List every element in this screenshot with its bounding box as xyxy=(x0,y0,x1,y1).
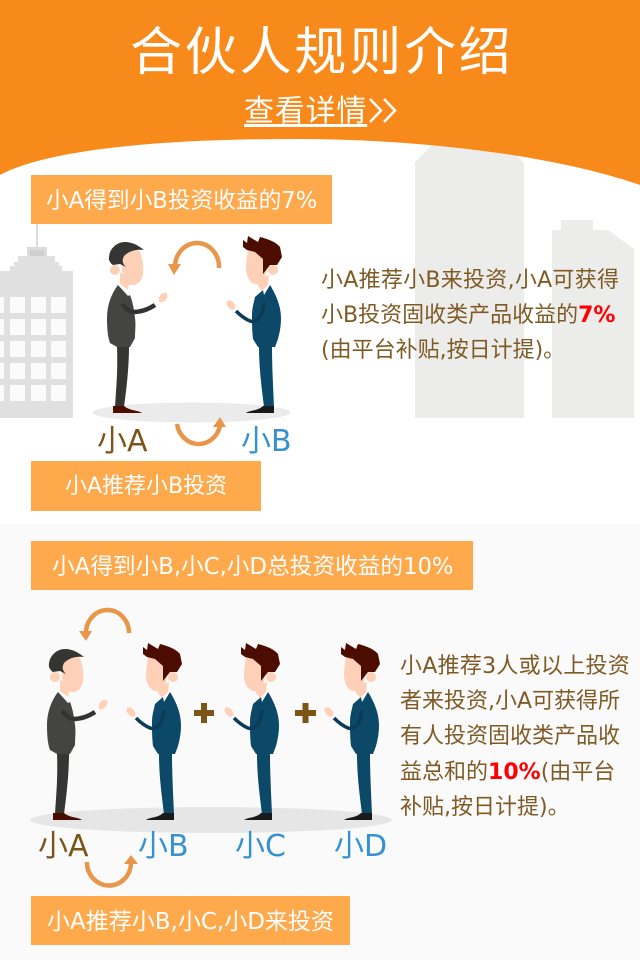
link: view details: 查看详情 xyxy=(244,94,367,129)
text: section 1 description: (由平台补贴,按日计提)。 xyxy=(321,338,565,363)
left building xyxy=(0,224,73,418)
callout: A recommends B, C, D: 小A推荐小B,小C,小D来投资 xyxy=(47,909,334,935)
heading: section 1 reward xyxy=(31,175,332,224)
text: section 2 description: 有人投资固收类产品收 xyxy=(400,724,620,749)
label: B section 1: 小B xyxy=(241,424,292,459)
orange header curve xyxy=(0,0,640,185)
text: section 2 description: 小A推荐3人或以上投资 xyxy=(400,654,630,679)
double chevron icon xyxy=(370,99,395,122)
text: section 1 description xyxy=(321,268,619,363)
arrow: top section 2 xyxy=(79,610,129,641)
ground shadow 2 xyxy=(30,807,392,833)
right buildings xyxy=(415,144,634,418)
callout: A recommends B, C, D xyxy=(31,896,350,945)
label: A section 1: 小A xyxy=(97,424,148,459)
text: section 1 description: 小B投资固收类产品收益的7% xyxy=(321,303,615,328)
title: 合伙人规则介绍 xyxy=(130,23,514,83)
figure: A in section 2 xyxy=(47,649,109,820)
callout: A recommends B xyxy=(31,461,261,511)
heading: section 1 reward: 小A得到小B投资收益的7% xyxy=(46,188,317,214)
figure: A in section 1 xyxy=(107,242,169,413)
callout: A recommends B: 小A推荐小B投资 xyxy=(65,474,227,499)
plus sign 1 xyxy=(194,703,214,723)
text: section 1 description: 小A推荐小B来投资,小A可获得 xyxy=(321,268,619,293)
figure: C in section 2 xyxy=(223,643,280,820)
heading: section 2 reward xyxy=(31,541,473,590)
text: section 2 description: 者来投资,小A可获得所 xyxy=(400,689,620,714)
plus sign 2 xyxy=(295,703,316,723)
figure: B in section 2 xyxy=(125,643,182,820)
label: A section 2: 小A xyxy=(38,829,89,864)
arrow: top section 1 xyxy=(168,243,219,275)
text: section 2 description xyxy=(400,654,630,820)
text: section 2 description: 益总和的10%(由平台 xyxy=(400,760,615,785)
label: B section 2: 小B xyxy=(138,829,189,864)
arrow: bottom section 2 xyxy=(87,855,138,886)
figure: B in section 1 xyxy=(225,236,282,413)
ground shadow 1 xyxy=(92,402,290,422)
text: section 2 description: 补贴,按日计提)。 xyxy=(400,795,570,820)
label: D section 2: 小D xyxy=(334,829,387,864)
arrow: bottom section 1 xyxy=(177,417,226,444)
label: C section 2: 小C xyxy=(235,829,286,864)
figure: D in section 2 xyxy=(323,643,380,820)
heading: section 2 reward: 小A得到小B,小C,小D总投资收益的10% xyxy=(52,554,454,580)
section 2 background xyxy=(0,524,640,960)
